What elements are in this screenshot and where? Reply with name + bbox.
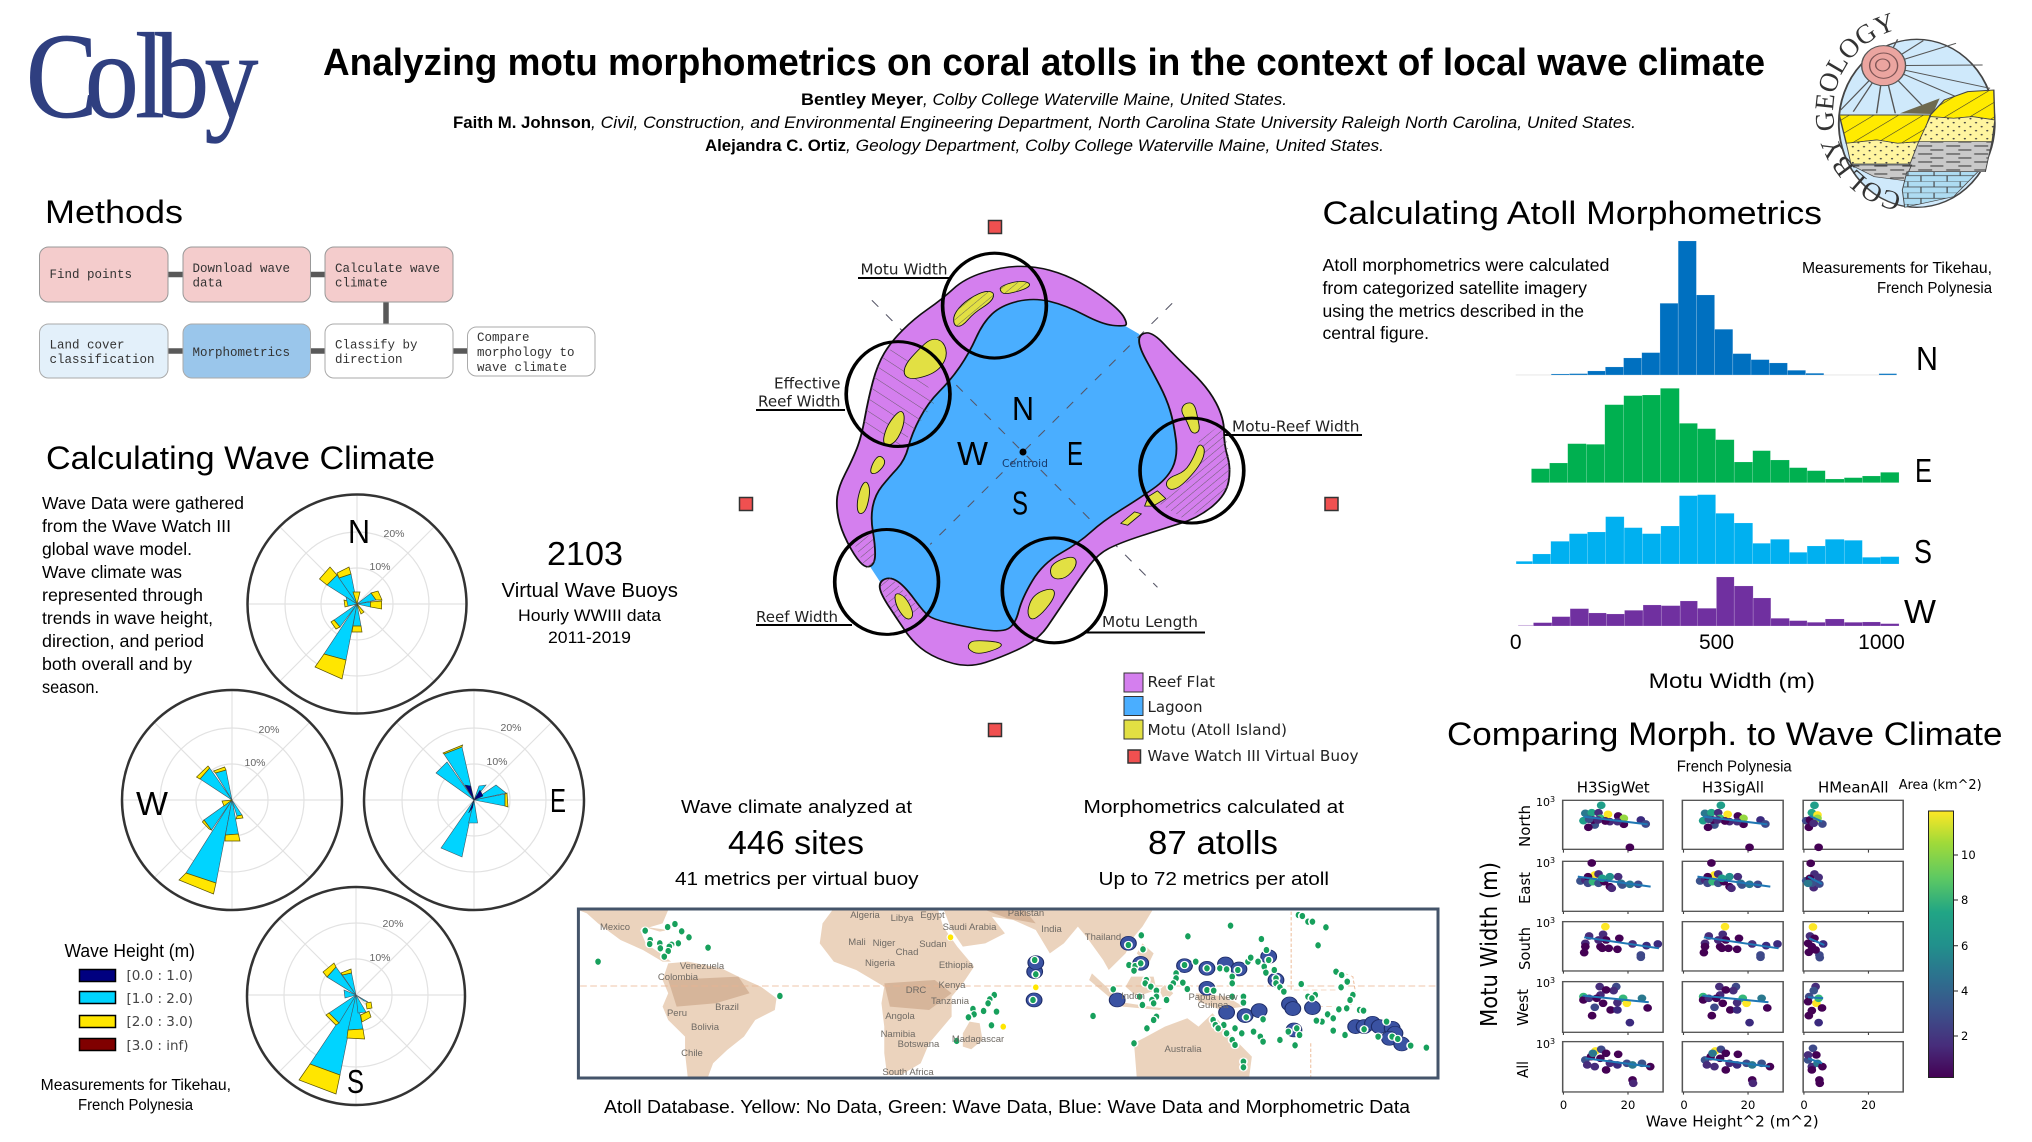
legend: wave height: [0.0 : 1.0) [126, 968, 193, 984]
text: wave data description [42, 493, 244, 697]
text: wave data description: from the Wave Watch III [42, 516, 231, 536]
authors: , Colby College Waterville Maine, United States. [923, 90, 1287, 109]
measurement labels: Motu Length [1102, 613, 1198, 631]
x axis title: Wave Height^2 (m^2) [1646, 1113, 1819, 1131]
map: atoll database: India [1041, 924, 1063, 935]
colorbar: area: 2 [1961, 1029, 1968, 1043]
histogram: South: S [1914, 533, 1932, 570]
legend: wave height [64, 941, 195, 1054]
colorbar: area [1928, 811, 1976, 1078]
central atoll diagram [740, 220, 1362, 736]
authors: Alejandra C. Ortiz [705, 136, 846, 155]
row labels [1514, 805, 1534, 1078]
chart titles: HMeanAll [1818, 779, 1888, 797]
legend: wave height: [3.0 : inf) [126, 1038, 188, 1054]
wind rose: East: 20% [500, 722, 522, 734]
note: measurements for Tikehau (wave) [41, 1077, 231, 1114]
wind rose: South: 10% [369, 952, 391, 964]
measurement labels: Motu Width [860, 260, 948, 278]
text: wave data description: represented through [42, 585, 203, 605]
flowchart: methods: classification [50, 353, 155, 367]
stat: morphometrics atolls [1084, 796, 1344, 889]
map: atoll database: Madagascar [952, 1034, 1004, 1045]
row labels: East [1516, 872, 1534, 904]
map: atoll database: Tanzania [931, 996, 970, 1007]
map: atoll database: Peru [667, 1008, 687, 1019]
measurement labels [756, 260, 1362, 632]
x tick labels: 0 [1800, 1098, 1808, 1112]
histogram axis labels: 500 [1699, 631, 1734, 654]
x tick labels: 20 [1741, 1098, 1755, 1112]
note: measurements for Tikehau (morphometrics): Measurements for Tikehau, [1802, 260, 1992, 277]
legend: atoll diagram: Wave Watch III Virtual Buoy [1148, 747, 1359, 765]
row labels: South [1516, 927, 1534, 970]
text: wave data description: direction, and period [42, 631, 204, 651]
map: atoll database: Colombia [658, 972, 699, 983]
text: atoll morphometrics description: Atoll morphometrics were calculated [1322, 255, 1610, 275]
stat: 2103 virtual wave buoys: 2011-2019 [548, 628, 631, 647]
y tick labels [1536, 795, 1555, 1051]
buoys [740, 220, 1338, 736]
text: wave data description: Wave Data were gathered [42, 493, 244, 513]
y tick labels: 3 [1550, 976, 1555, 985]
flowchart: methods: Classify by [335, 338, 418, 352]
y tick labels: 3 [1550, 856, 1555, 865]
map: atoll database: Bolivia [691, 1022, 720, 1033]
measurement labels: Reef Width [758, 392, 840, 410]
text: wave data description: Wave climate was [42, 562, 182, 582]
title: Analyzing motu morphometrics on coral atolls in the context of local wave climate [323, 42, 1765, 84]
wind rose: South [247, 886, 465, 1105]
text: wave data description: season. [42, 677, 99, 697]
note: measurements for Tikehau (morphometrics) [1802, 260, 1992, 297]
scatter panels [1563, 800, 1903, 1095]
authors: Faith M. Johnson [453, 113, 591, 132]
stat: morphometrics atolls: 87 atolls [1148, 824, 1278, 861]
stat: morphometrics atolls: Morphometrics calculated at [1084, 796, 1344, 817]
flowchart: methods: Compare [477, 331, 530, 345]
map: atoll database: Kenya [939, 980, 966, 991]
authors: , Civil, Construction, and Environmental Engineering Department, North Carolina State University Raleigh North Carolina, United States. [591, 113, 1636, 132]
map: atoll database: Angola [885, 1011, 916, 1022]
legend: atoll diagram: Lagoon [1148, 698, 1202, 716]
measurement labels: Motu-Reef Width [1232, 418, 1360, 436]
row labels: West [1514, 989, 1532, 1026]
map: atoll database: Niger [873, 938, 895, 949]
y tick labels: 3 [1550, 916, 1555, 925]
legend: atoll diagram: Motu (Atoll Island) [1148, 721, 1287, 739]
colorbar: area: 4 [1961, 984, 1968, 998]
histogram axis labels: 1000 [1858, 631, 1905, 654]
wind rose: North: N [348, 513, 370, 550]
histogram: North [1516, 241, 1938, 377]
stat: wave climate sites: 446 sites [728, 824, 864, 861]
legend: atoll diagram: Reef Flat [1148, 673, 1215, 691]
wind rose: East: E [550, 782, 566, 819]
histogram axis labels: Motu Width (m) [1649, 670, 1815, 693]
map: atoll database: Pakistan [1008, 908, 1044, 919]
text: atoll morphometrics description: from categorized satellite imagery [1322, 278, 1587, 298]
authors: , Geology Department, Colby College Waterville Maine, United States. [846, 136, 1384, 155]
histogram: South [1516, 495, 1932, 570]
y tick labels: 10 [1536, 917, 1550, 930]
map: atoll database: Nigeria [865, 958, 896, 969]
text: wave data description: global wave model. [42, 539, 192, 559]
map: atoll database: Mexico [600, 922, 630, 933]
map: atoll database: Chad [896, 947, 918, 958]
chart titles: French Polynesia [1677, 759, 1792, 776]
map: atoll database: Libya [891, 913, 914, 924]
flowchart: methods: Morphometrics [192, 346, 290, 360]
map: atoll database: Namibia [881, 1029, 916, 1040]
map: atoll database: Australia [1165, 1044, 1202, 1055]
flowchart: methods: direction [335, 353, 403, 367]
map: atoll database: Mali [848, 937, 866, 948]
chart titles: Area (km^2) [1899, 778, 1982, 793]
y tick labels: 10 [1536, 796, 1550, 809]
colorbar: area: 10 [1961, 848, 1976, 862]
flowchart: methods: data [192, 276, 223, 290]
compass letters and centroid [957, 390, 1083, 522]
histogram: West [1518, 577, 1937, 630]
map: atoll database: DRC [906, 985, 926, 996]
x tick labels: 20 [1861, 1098, 1876, 1112]
y axis title: Motu Width (m) [1477, 862, 1503, 1027]
wind rose: South: 20% [382, 918, 404, 930]
wind rose: West: 20% [258, 724, 280, 736]
wind rose: East: 10% [486, 756, 508, 768]
note: measurements for Tikehau (wave): French Polynesia [78, 1097, 193, 1114]
row labels: North [1516, 805, 1534, 847]
y tick labels: 10 [1536, 857, 1550, 870]
map: atoll database: Brazil [715, 1002, 739, 1013]
histogram axis labels: 0 [1510, 631, 1522, 654]
wind rose: East [364, 690, 584, 910]
flowchart: methods [40, 247, 595, 378]
row labels: All [1514, 1061, 1532, 1078]
compass letters and centroid: Centroid [1002, 458, 1048, 470]
logo: Colby Geology seal: COLBY GEOLOGY [1815, 12, 1899, 209]
caption: atoll database: Atoll Database. Yellow: No Data, Green: Wave Data, Blue: Wave Data and Morphometric Data [604, 1096, 1411, 1117]
stat: 2103 virtual wave buoys: Virtual Wave Buoys [502, 580, 678, 602]
compass letters and centroid: E [1067, 435, 1083, 472]
flowchart: methods: Land cover [50, 338, 125, 352]
flowchart: methods: Find points [50, 268, 132, 282]
text: atoll morphometrics description: central figure. [1322, 323, 1429, 343]
flowchart: methods: Calculate wave [335, 262, 440, 276]
x tick labels [1560, 1098, 1876, 1112]
stat: 2103 virtual wave buoys: 2103 [547, 535, 623, 572]
authors [453, 90, 1636, 155]
map: atoll database: Algeria [850, 910, 880, 921]
chart titles: H3SigWet [1577, 779, 1650, 797]
wind rose: North [248, 494, 466, 714]
stat: 2103 virtual wave buoys: Hourly WWIII data [518, 606, 662, 625]
y tick labels: 10 [1536, 977, 1550, 990]
map: atoll database: Botswana [898, 1039, 940, 1050]
heading: Comparing Morph. to Wave Climate: Comparing Morph. to Wave Climate [1447, 716, 2002, 752]
wind rose: North: 20% [383, 528, 405, 540]
map: atoll database: Indon [1121, 991, 1145, 1002]
map: atoll database: Sudan [919, 939, 947, 950]
wind rose: South: S [347, 1063, 364, 1100]
measurement labels: Reef Width [756, 608, 838, 626]
heading: Calculating Atoll Morphometrics: Calculating Atoll Morphometrics [1322, 195, 1822, 231]
legend: atoll diagram [1124, 673, 1359, 765]
colorbar: area: 6 [1961, 939, 1968, 953]
text: atoll morphometrics description [1322, 255, 1610, 343]
histogram: East: E [1915, 452, 1932, 489]
flowchart: methods: morphology to [477, 346, 575, 360]
map: atoll database: Ethiopia [939, 960, 974, 971]
note: measurements for Tikehau (wave): Measurements for Tikehau, [41, 1077, 231, 1094]
stat: wave climate sites: Wave climate analyzed at [681, 796, 912, 817]
note: measurements for Tikehau (morphometrics): French Polynesia [1877, 280, 1992, 297]
histogram: East [1531, 388, 1932, 489]
wind rose: West: 10% [244, 757, 266, 769]
stat: wave climate sites [675, 796, 919, 889]
map: atoll database: Papua New [1188, 992, 1238, 1003]
histogram: North: N [1916, 340, 1938, 377]
map: atoll database: Thailand [1085, 932, 1121, 943]
authors: Bentley Meyer [801, 90, 923, 109]
text: wave data description: trends in wave height, [42, 608, 213, 628]
flowchart: methods: climate [335, 276, 388, 290]
histogram axis labels [1510, 631, 1905, 693]
atoll shape [835, 253, 1244, 665]
wind rose: West [122, 690, 342, 910]
heading: Calculating Wave Climate: Calculating Wave Climate [46, 440, 435, 476]
chart titles: H3SigAll [1702, 779, 1764, 797]
map: atoll database: South Africa [882, 1067, 934, 1078]
map: atoll database: Guinea [1198, 1000, 1229, 1011]
flowchart: methods: wave climate [477, 361, 567, 375]
x tick labels: 20 [1621, 1098, 1635, 1112]
stat: 2103 virtual wave buoys [502, 535, 678, 647]
y tick labels: 3 [1550, 1037, 1555, 1046]
colorbar: area: 8 [1961, 893, 1968, 907]
x tick labels: 0 [1680, 1098, 1688, 1112]
wind rose: North: 10% [369, 561, 391, 573]
map: atoll database: Egypt [920, 910, 945, 921]
map: atoll database [578, 908, 1438, 1078]
histogram: West: W [1904, 593, 1937, 630]
flowchart: methods: Download wave [192, 262, 290, 276]
compass letters and centroid: S [1012, 484, 1028, 522]
y tick labels: 3 [1550, 795, 1555, 804]
x tick labels: 0 [1560, 1098, 1567, 1112]
stat: wave climate sites: 41 metrics per virtual buoy [675, 868, 919, 889]
compass letters and centroid: N [1012, 390, 1034, 427]
heading: Methods: Methods [45, 194, 183, 230]
legend: wave height: Wave Height (m) [64, 941, 195, 961]
legend: wave height: [1.0 : 2.0) [126, 991, 193, 1007]
map: atoll database: Chile [681, 1048, 703, 1059]
logo: Colby Geology seal [1815, 12, 1996, 209]
wind rose: West: W [136, 785, 169, 822]
y tick labels: 10 [1536, 1038, 1550, 1051]
legend: wave height: [2.0 : 3.0) [126, 1014, 193, 1030]
stat: morphometrics atolls: Up to 72 metrics per atoll [1098, 868, 1329, 889]
logo: Colby: Colby [26, 9, 258, 144]
chart titles [1577, 759, 1982, 797]
compass letters and centroid: W [957, 435, 989, 472]
measurement labels: Effective [774, 374, 840, 392]
map: atoll database: Saudi Arabia [943, 922, 997, 933]
map: atoll database: Venezuela [680, 961, 725, 972]
text: atoll morphometrics description: using the metrics described in the [1322, 301, 1584, 321]
text: wave data description: both overall and by [42, 654, 192, 674]
scatter matrix: motu width vs wave height [1477, 759, 1982, 1131]
